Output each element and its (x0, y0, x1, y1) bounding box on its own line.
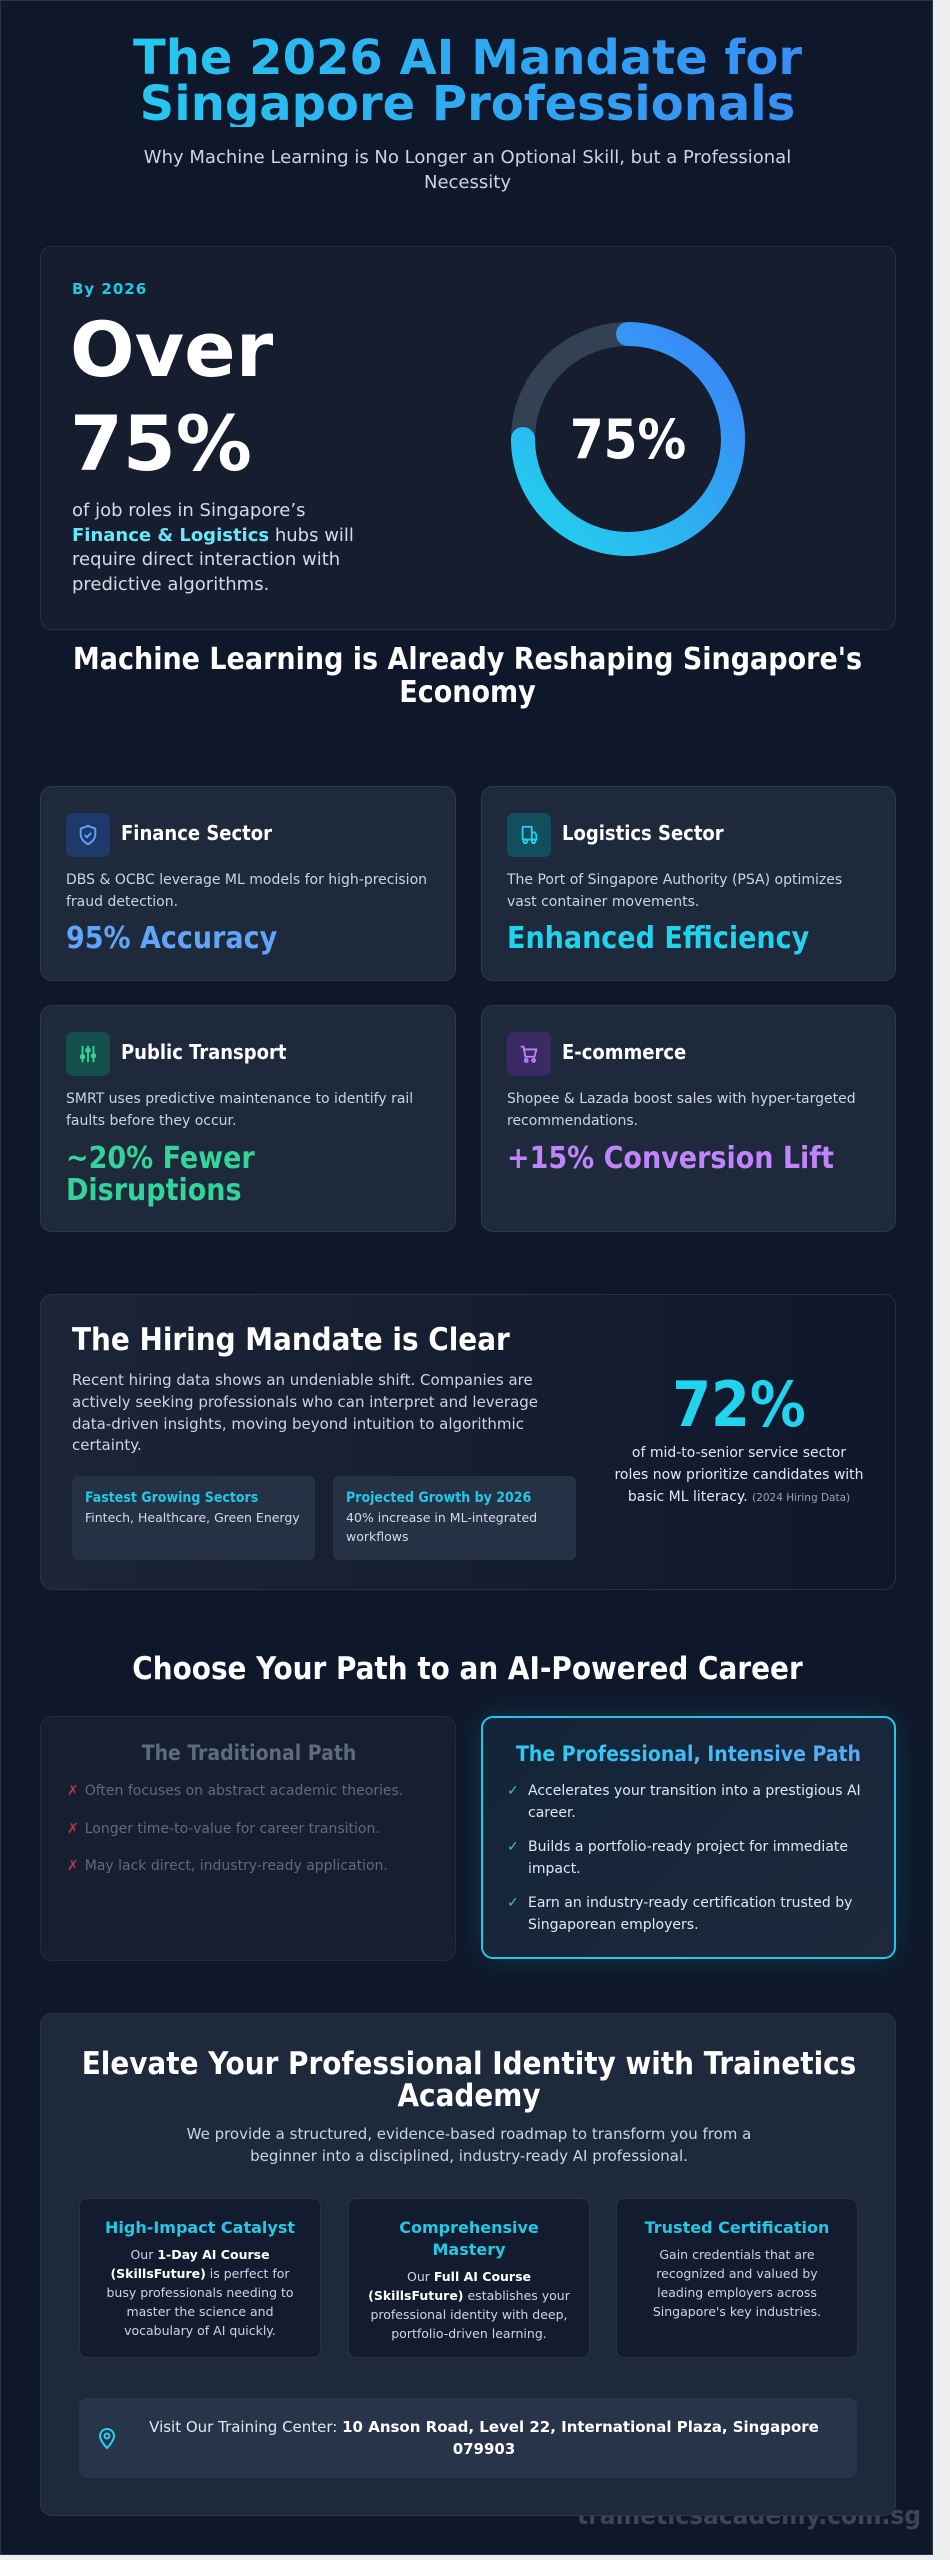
big stat (70, 305, 273, 488)
panel: public transport: Disruptions (66, 1173, 242, 1208)
panel: finance sector: DBS & OCBC leverage ML models for high-precision fraud detection. (66, 872, 427, 910)
donut chart: 75% (570, 408, 686, 471)
icon: cart (507, 1032, 551, 1076)
icon: shield (66, 813, 110, 857)
panel: public transport: ~20% Fewer (66, 1141, 255, 1176)
panel: public transport: Public Transport (121, 1040, 286, 1064)
subcard: mastery: Our Full AI Course (SkillsFuture) establishes your professional identity with deep, portfolio-driven learning. (368, 2269, 570, 2341)
panel: logistics sector: The Port of Singapore Authority (PSA) optimizes vast container movements. (507, 872, 842, 910)
panel: finance sector: Finance Sector (121, 821, 272, 845)
heading: choose path: Choose Your Path to an AI-Powered Career (132, 1651, 803, 1687)
intro text: We provide a structured, evidence-based roadmap to transform you from a beginner into a disciplined, industry-ready AI professional. (187, 2125, 751, 2165)
label: by 2026: By 2026 (72, 280, 147, 298)
heading: Elevate Your Professional Identity with Trainetics Academy (82, 2046, 856, 2114)
panel: finance sector: 95% Accuracy (66, 921, 277, 956)
address box (79, 2398, 857, 2478)
big stat: Over (70, 305, 273, 394)
subcard: high-impact: Our 1-Day AI Course (SkillsFuture) is perfect for busy professionals needing to master the science and vocabulary of AI quickly. (106, 2247, 294, 2338)
panel: e-commerce: Shopee & Lazada boost sales with hyper-targeted recommendations. (507, 1091, 856, 1129)
subcard: mastery: Comprehensive Mastery (399, 2218, 539, 2259)
box: fastest growing: Fastest Growing Sectors (85, 1490, 258, 1506)
list: benefits: ✓ (507, 1783, 519, 1799)
panel: public transport: SMRT uses predictive maintenance to identify rail faults before they occur. (66, 1091, 413, 1129)
panel: professional path: The Professional, Intensive Path (516, 1742, 861, 1766)
panel: finance sector (40, 786, 456, 981)
list: benefits: Accelerates your transition into a prestigious AI career. (528, 1783, 861, 1821)
caption: basic ML literacy. (2024 Hiring Data) (628, 1489, 850, 1505)
subcard: certification: Trusted Certification (645, 2218, 829, 2237)
panel: academy (40, 2013, 896, 2516)
paragraph: Recent hiring data shows an undeniable shift. Companies are actively seeking professionals who can interpret and leverage data‑driven insights, moving beyond intuition to algorithmic certainty. (72, 1371, 538, 1454)
panel: traditional path (40, 1716, 456, 1961)
panel: e-commerce (481, 1005, 896, 1232)
watermark: traineticsacademy.com.sg (577, 2501, 921, 2531)
stat: 72%: 72% (672, 1368, 806, 1441)
title: Singapore Professionals (140, 76, 795, 132)
box: fastest growing: Fintech, Healthcare, Green Energy (85, 1510, 300, 1525)
list: drawbacks (67, 1783, 403, 1874)
icon: truck (507, 813, 551, 857)
panel: hero stat (40, 246, 896, 630)
icon: sliders (66, 1032, 110, 1076)
heading: ML reshaping: Machine Learning is Already Reshaping Singapore's Economy (73, 642, 862, 710)
icon: location pin (99, 2428, 115, 2450)
title: The 2026 AI Mandate for (133, 30, 802, 86)
caption (614, 1445, 864, 1505)
list: benefits: Earn an industry-ready certification trusted by Singaporean employers. (528, 1895, 852, 1933)
panel: logistics sector (481, 786, 896, 981)
list: benefits: Builds a portfolio-ready project for immediate impact. (528, 1839, 848, 1877)
box: projected growth: 40% increase in ML-integrated workflows (346, 1510, 537, 1544)
box: projected growth: Projected Growth by 2026 (346, 1490, 531, 1506)
big stat: 75% (70, 399, 252, 488)
box: fastest growing (72, 1476, 315, 1560)
box: projected growth (333, 1476, 576, 1560)
panel: public transport (40, 1005, 456, 1232)
panel: e-commerce: +15% Conversion Lift (507, 1141, 834, 1176)
subcard: certification (616, 2198, 858, 2358)
panel: logistics sector: Logistics Sector (562, 821, 724, 845)
caption: of mid-to-senior service sector (632, 1445, 846, 1461)
subcard: high-impact: High-Impact Catalyst (105, 2218, 295, 2237)
subcard: mastery (348, 2198, 590, 2358)
list: drawbacks: ✗ Often focuses on abstract academic theories. (67, 1783, 403, 1799)
subcard: certification: Gain credentials that are recognized and valued by leading employers across Singapore's key industries. (653, 2247, 821, 2319)
panel: professional path (481, 1716, 896, 1959)
title (1, 35, 934, 127)
panel: logistics sector: Enhanced Efficiency (507, 921, 809, 956)
description: of job roles in Singapore’s Finance & Logistics hubs will require direct interaction with predictive algorithms. (72, 500, 354, 594)
address box: Visit Our Training Center: 10 Anson Road, Level 22, International Plaza, Singapore 079903 (149, 2418, 819, 2458)
subtitle: Why Machine Learning is No Longer an Optional Skill, but a Professional Necessity (144, 147, 791, 193)
heading: The Hiring Mandate is Clear (72, 1322, 510, 1358)
panel: traditional path: The Traditional Path (142, 1741, 356, 1765)
panel: e-commerce: E-commerce (562, 1040, 686, 1064)
list: benefits: ✓ (507, 1895, 519, 1911)
caption: roles now prioritize candidates with (614, 1467, 864, 1483)
panel: hiring mandate (40, 1294, 896, 1590)
donut chart (511, 322, 745, 556)
list: drawbacks: ✗ May lack direct, industry-ready application. (67, 1858, 388, 1874)
list: benefits: ✓ (507, 1839, 519, 1855)
list: drawbacks: ✗ Longer time-to-value for career transition. (67, 1820, 380, 1836)
subcard: high-impact (79, 2198, 321, 2358)
list: benefits (507, 1783, 861, 1933)
